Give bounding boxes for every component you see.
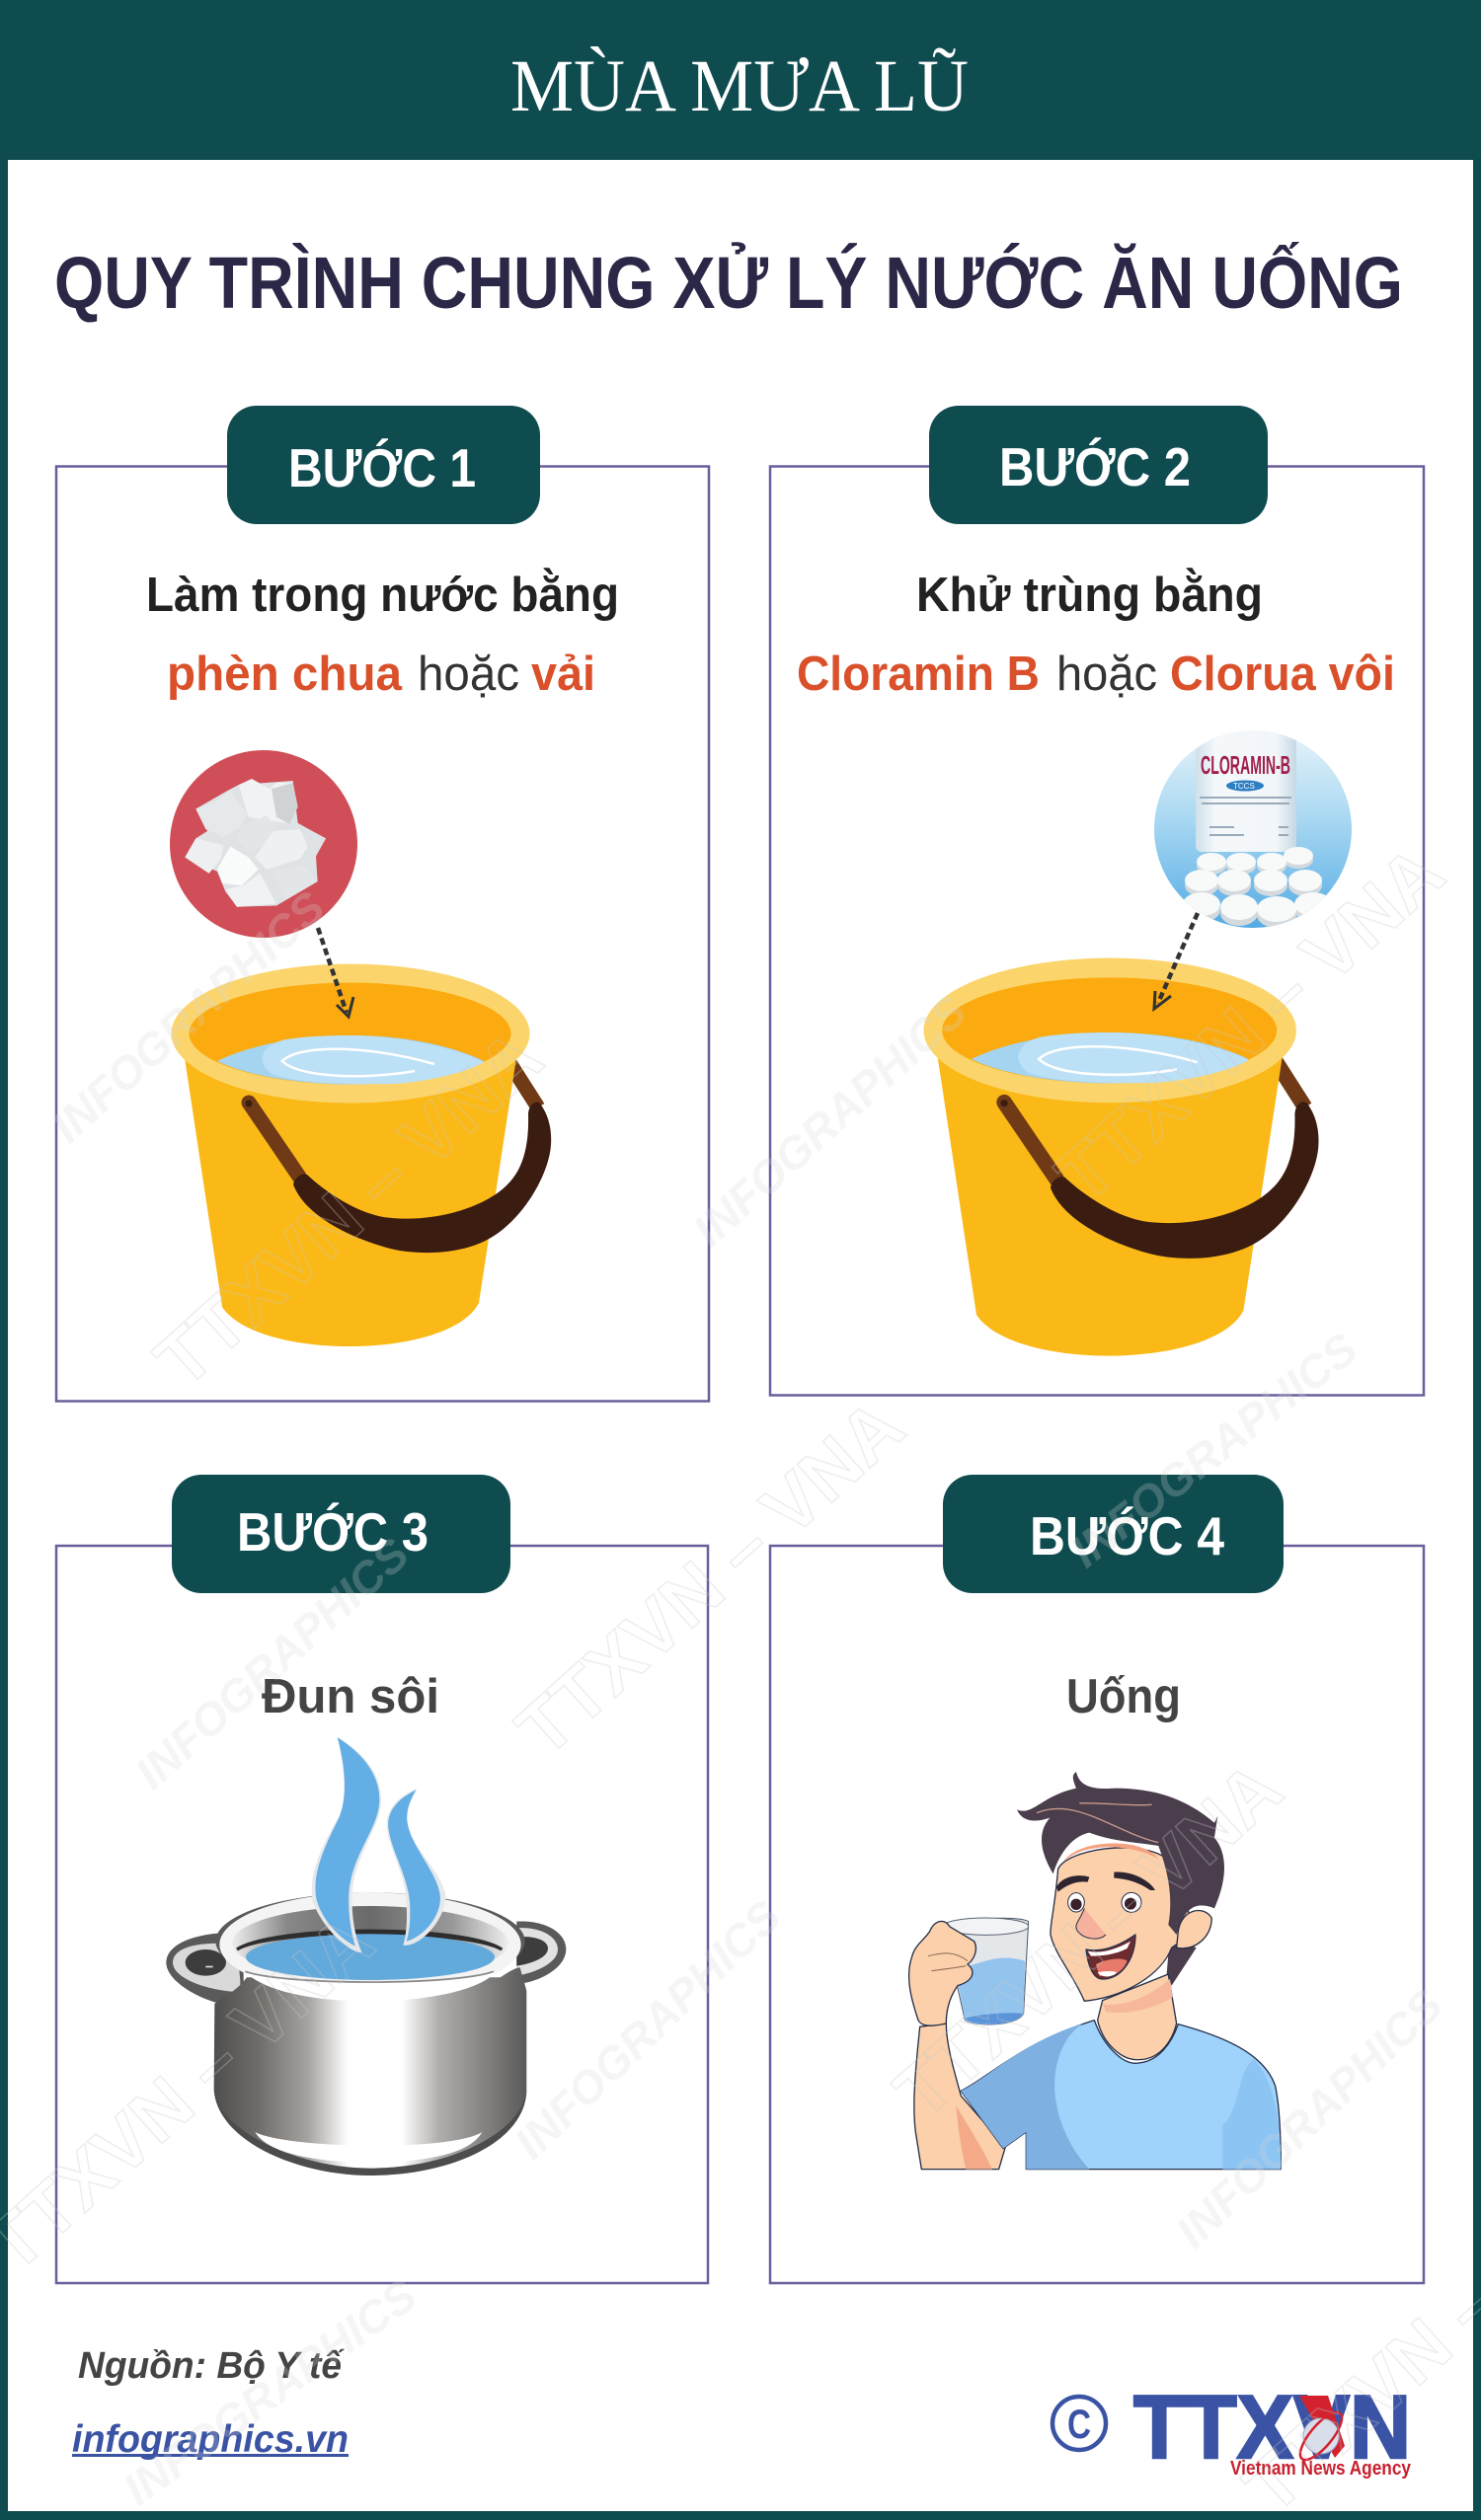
copyright symbol bbox=[1052, 2397, 1106, 2450]
watermark overlay: TTXVN – VNA bbox=[139, 1015, 559, 1404]
watermark overlay: INFOGRAPHICS bbox=[125, 1528, 419, 1798]
panel 4 border bbox=[770, 1546, 1424, 2283]
watermark overlay: INFOGRAPHICS bbox=[683, 985, 976, 1256]
icon: steel pot with steam bbox=[166, 1737, 566, 2176]
steam bbox=[312, 1737, 381, 1952]
watermark overlay bbox=[0, 830, 1481, 2520]
watermark overlay: TTXVN – VNA bbox=[879, 1746, 1298, 2135]
step 1 description: Làm trong nước bằng bbox=[146, 568, 619, 622]
icon: Cloramin-B jar and tablets: CLORAMIN-B bbox=[1201, 750, 1290, 780]
nose bbox=[1076, 1908, 1106, 1939]
watermark overlay: INFOGRAPHICS bbox=[41, 881, 335, 1152]
left handle bbox=[166, 1933, 244, 2007]
panel: step 4 bbox=[770, 1475, 1424, 2283]
icon: Cloramin-B jar and tablets: TCCS bbox=[1233, 782, 1255, 791]
panel 3 border bbox=[56, 1546, 708, 2283]
panel 2 border bbox=[770, 466, 1424, 1396]
hand bbox=[909, 1921, 975, 2025]
brows bbox=[1056, 1875, 1089, 1892]
website link: infographics.vn bbox=[72, 2418, 349, 2461]
step 1 description bbox=[146, 568, 619, 701]
icon: bucket 1 bbox=[172, 963, 551, 1346]
step 2 description: Clorua vôi bbox=[1170, 648, 1395, 701]
panel: step 2 bbox=[770, 406, 1424, 1396]
icon: bucket 2 bbox=[923, 958, 1319, 1356]
panel 1 border bbox=[56, 466, 709, 1402]
logo: TTXVN: Vietnam News Agency bbox=[1230, 2458, 1412, 2480]
step 1 description: vải bbox=[531, 648, 595, 701]
step 2 description bbox=[797, 568, 1395, 701]
step 3 badge: BƯỚC 3 bbox=[237, 1501, 429, 1563]
face bbox=[1051, 1848, 1195, 2001]
watermark overlay: TTXVN – VNA bbox=[1041, 830, 1460, 1219]
watermark overlay: INFOGRAPHICS bbox=[1060, 1323, 1366, 1577]
shirt bbox=[961, 2021, 1281, 2170]
neck bbox=[1098, 1974, 1177, 2060]
watermark overlay: INFOGRAPHICS bbox=[1166, 1979, 1452, 2257]
step 3 badge bbox=[172, 1475, 510, 1593]
logo: TTXVN: TTXVN bbox=[1133, 2378, 1411, 2478]
step 2 badge bbox=[929, 406, 1268, 524]
step 4 badge: BƯỚC 4 bbox=[1030, 1505, 1224, 1566]
step 3 description: Đun sôi bbox=[262, 1670, 439, 1723]
eyes bbox=[1068, 1893, 1084, 1912]
body bbox=[214, 1967, 526, 2176]
watermark overlay: INFOGRAPHICS bbox=[505, 1890, 791, 2169]
arrow: alum to bucket bbox=[318, 928, 353, 1017]
step 2 description: Cloramin B bbox=[797, 648, 1040, 701]
ear bbox=[1177, 1911, 1211, 1948]
icon: alum rocks in red circle bbox=[170, 750, 357, 938]
icon: Cloramin-B jar and tablets bbox=[1150, 725, 1358, 933]
step 1 description: phèn chua bbox=[167, 648, 403, 701]
step 4 badge bbox=[943, 1475, 1284, 1593]
step 1 description: hoặc bbox=[418, 648, 519, 701]
rim bbox=[215, 1892, 525, 1990]
watermark overlay: TTXVN – VNA bbox=[501, 1384, 920, 1773]
arrow: tablets to bucket bbox=[1154, 913, 1198, 1009]
step 1 badge: BƯỚC 1 bbox=[288, 437, 476, 498]
step 2 description: Khử trùng bằng bbox=[916, 568, 1263, 622]
mouth bbox=[1086, 1935, 1135, 1979]
step 2 description: hoặc bbox=[1056, 648, 1157, 701]
source note: Nguồn: Bộ Y tế bbox=[78, 2345, 346, 2387]
arm bbox=[914, 2024, 1005, 2170]
hair bbox=[1017, 1772, 1224, 1935]
step 2 badge: BƯỚC 2 bbox=[999, 436, 1191, 497]
watermark overlay: INFOGRAPHICS bbox=[114, 2269, 426, 2515]
icon: man drinking water bbox=[909, 1772, 1281, 2170]
nape hair bbox=[1167, 1935, 1197, 1986]
glass bbox=[945, 1918, 1029, 2024]
copyright symbol: C bbox=[1067, 2401, 1091, 2447]
panel: step 3 bbox=[56, 1475, 708, 2283]
panel: step 1 bbox=[56, 406, 709, 1402]
header title: MÙA MƯA LŨ bbox=[510, 45, 969, 127]
step 4 description: Uống bbox=[1066, 1670, 1181, 1723]
right handle bbox=[516, 1921, 566, 1984]
step 1 badge bbox=[227, 406, 540, 524]
